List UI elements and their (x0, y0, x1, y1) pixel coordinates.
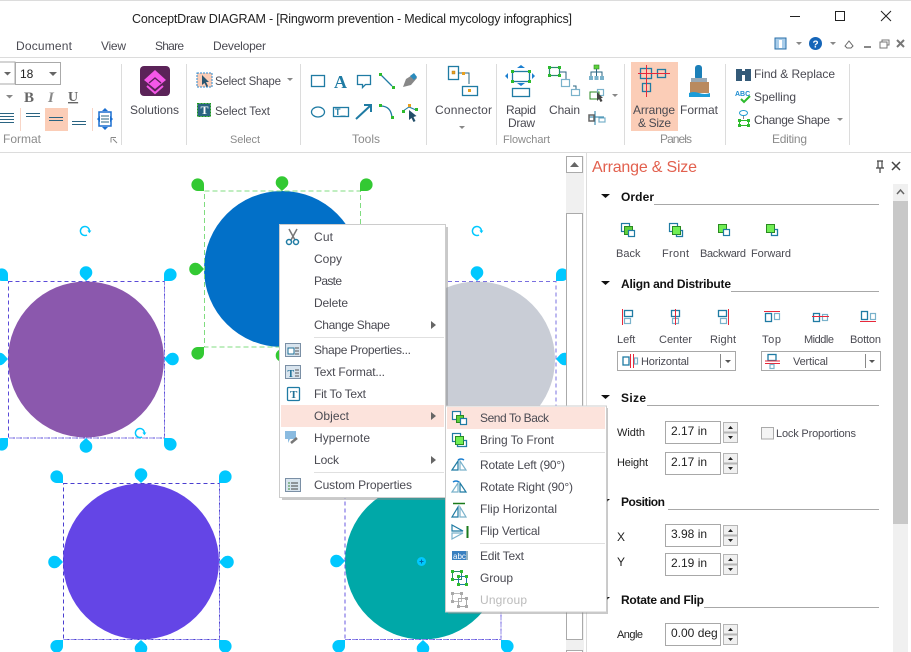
icon: front (662, 224, 689, 260)
text format group (0, 62, 117, 146)
submenu items: Flip Vertical (480, 524, 540, 538)
icon: text format: T (288, 369, 294, 380)
menu tabs: View (101, 39, 126, 53)
section: rotate and flip: 0.00 deg (671, 626, 718, 640)
section: size: 2.17 in (671, 455, 707, 469)
icon: hypernote (285, 431, 297, 443)
connector button (435, 66, 492, 129)
select group: Select (230, 134, 260, 146)
text format group: I (47, 90, 55, 106)
change shape: Change Shape (754, 113, 830, 127)
panel: arrange and size (587, 153, 911, 652)
menu tabs (0, 39, 911, 58)
icon: custom properties (286, 478, 300, 492)
submenu items: Edit Text (480, 549, 525, 563)
submenu items: Flip Horizontal (480, 502, 557, 516)
circle: gray (399, 227, 571, 438)
select group: Select Shape (215, 76, 281, 88)
submenu items: Bring To Front (480, 433, 555, 447)
solutions button: Solutions (130, 103, 179, 117)
text format group: U (68, 90, 78, 105)
spelling: Spelling (754, 90, 796, 104)
connector button: Connector (435, 103, 492, 117)
flowchart group: Rapid (506, 103, 536, 117)
tools group: A (334, 72, 347, 92)
circle: purple (0, 227, 179, 453)
section: size (601, 391, 879, 474)
find and replace: Find & Replace (754, 67, 835, 81)
arrange and size button (631, 62, 678, 131)
panels group (631, 62, 719, 146)
panel title: Arrange & Size (592, 159, 697, 176)
submenu items: Send To Back (480, 411, 550, 425)
spelling (735, 90, 796, 104)
menu tabs: Share (155, 39, 184, 53)
text format group: B (24, 90, 34, 106)
canvas (0, 176, 571, 652)
section: size: Height (617, 457, 648, 469)
icon: rotate left (452, 459, 466, 470)
section: position: 3.98 in (671, 527, 707, 541)
circle: blue selected (189, 176, 373, 362)
icon: ungroup (451, 592, 468, 608)
icon: edit text: abc (453, 552, 466, 561)
menu items: Cut (314, 230, 334, 244)
text format group: 18 (20, 67, 34, 81)
tools group: Tools (352, 132, 380, 146)
align labels: Center (659, 334, 692, 346)
submenu items: Group (480, 571, 513, 585)
icon: backward: Backward (700, 248, 746, 260)
window minimize button (790, 16, 800, 17)
menu items: Change Shape (314, 318, 390, 332)
section: align and distribute (601, 277, 881, 370)
highlighted item: send to back (447, 407, 605, 429)
icon: fit to text (288, 388, 300, 401)
menu items: Custom Properties (314, 478, 412, 492)
icon: rotate right (452, 481, 466, 492)
icon: forward: Forward (751, 248, 791, 260)
section: position: 2.19 in (671, 556, 707, 570)
section: rotate and flip: Angle (617, 629, 643, 641)
highlighted item: object (281, 405, 444, 427)
menu items: Fit To Text (314, 387, 367, 401)
context menu (280, 224, 448, 500)
circle: teal (330, 484, 514, 652)
menu items: Lock (314, 453, 340, 467)
section: order: Order (621, 190, 654, 204)
icon: back (616, 224, 641, 260)
window maximize button (836, 12, 844, 20)
dropdown: vertical: Vertical (793, 356, 828, 368)
submenu arrows (431, 321, 436, 464)
flowchart group (503, 65, 618, 146)
select group: Select Text (215, 106, 271, 118)
select group (197, 73, 293, 146)
icon: text format (286, 366, 300, 380)
icon: forward (751, 224, 791, 260)
circle: violet (48, 468, 234, 652)
editing group: Editing (772, 132, 807, 146)
section: position: Position (621, 495, 665, 509)
submenu items: Rotate Right (90°) (480, 480, 573, 494)
icon: backward (700, 224, 746, 260)
icon: flip vertical (452, 525, 468, 539)
flowchart group: Chain (549, 103, 580, 117)
menu items: Hypernote (314, 431, 370, 445)
icon: back: Back (616, 248, 641, 260)
text format group: Format (3, 132, 42, 146)
document title: ConceptDraw DIAGRAM - [Ringworm prevention - Medical mycology infographics] (132, 12, 572, 26)
panels group: Panels (660, 132, 692, 146)
pin and close icons (876, 161, 900, 173)
menu items: Copy (314, 252, 342, 266)
align labels: Middle (804, 334, 834, 346)
title bar (132, 11, 891, 26)
menu items: Object (314, 409, 350, 423)
icon: scissors (286, 229, 298, 244)
icon: group (451, 570, 468, 586)
icon: flip horizontal (452, 504, 466, 517)
section: align and distribute: Align and Distribute (621, 277, 731, 291)
dropdown: horizontal: Horizontal (641, 356, 689, 368)
menu tabs: Document (16, 39, 73, 53)
section: position: X (617, 530, 625, 544)
align labels: Left (617, 334, 635, 346)
section: size: Size (621, 391, 646, 405)
spelling: ABC (735, 91, 750, 98)
tools group: T_ (335, 107, 346, 117)
align labels: Right (710, 334, 736, 346)
select group: T (200, 103, 209, 117)
flowchart group: Flowchart (503, 134, 550, 146)
dropdown: vertical (762, 352, 880, 370)
section: size: Width (617, 427, 645, 439)
section: rotate and flip (601, 593, 879, 646)
submenu items: Ungroup (480, 593, 527, 607)
tools group (312, 72, 418, 146)
panel scrollbar (893, 184, 908, 652)
icon: front: Front (662, 248, 689, 260)
align labels: Botton (850, 334, 881, 346)
icon: fit to text: T (290, 389, 298, 401)
section: position: Y (617, 555, 625, 569)
align labels (617, 334, 881, 346)
dropdown: horizontal (618, 352, 736, 370)
help and window mini toolbar (775, 37, 904, 50)
help and window mini toolbar: ? (812, 40, 819, 50)
arrange and size button: Arrange (633, 103, 675, 117)
window close button (881, 11, 891, 21)
solutions button (130, 66, 179, 117)
canvas scrollbar (566, 153, 587, 652)
editing group (735, 67, 843, 146)
align icons (622, 309, 876, 325)
submenu items: Rotate Left (90°) (480, 458, 565, 472)
section: order (601, 190, 879, 260)
submenu items (480, 411, 573, 607)
icon: bring to front (452, 434, 466, 446)
menu items: Delete (314, 296, 348, 310)
ribbon (0, 62, 911, 153)
section: size: 2.17 in (671, 424, 707, 438)
format brush button: Format (680, 103, 719, 117)
menu items: Shape Properties... (314, 343, 411, 357)
align labels: Top (762, 334, 781, 346)
section: rotate and flip: Rotate and Flip (621, 593, 704, 607)
icon: send to back (452, 412, 466, 424)
section: position (601, 495, 879, 576)
menu items: Text Format... (314, 365, 385, 379)
icon: shape properties (286, 344, 300, 356)
menu tabs: Developer (213, 39, 266, 53)
menu items: Paste (314, 274, 342, 288)
menu items (314, 230, 412, 492)
submenu: object (446, 406, 608, 614)
flowchart group: Draw (508, 116, 535, 130)
checkbox: lock proportions: Lock Proportions (776, 428, 856, 440)
arrange and size button: & Size (638, 116, 671, 130)
